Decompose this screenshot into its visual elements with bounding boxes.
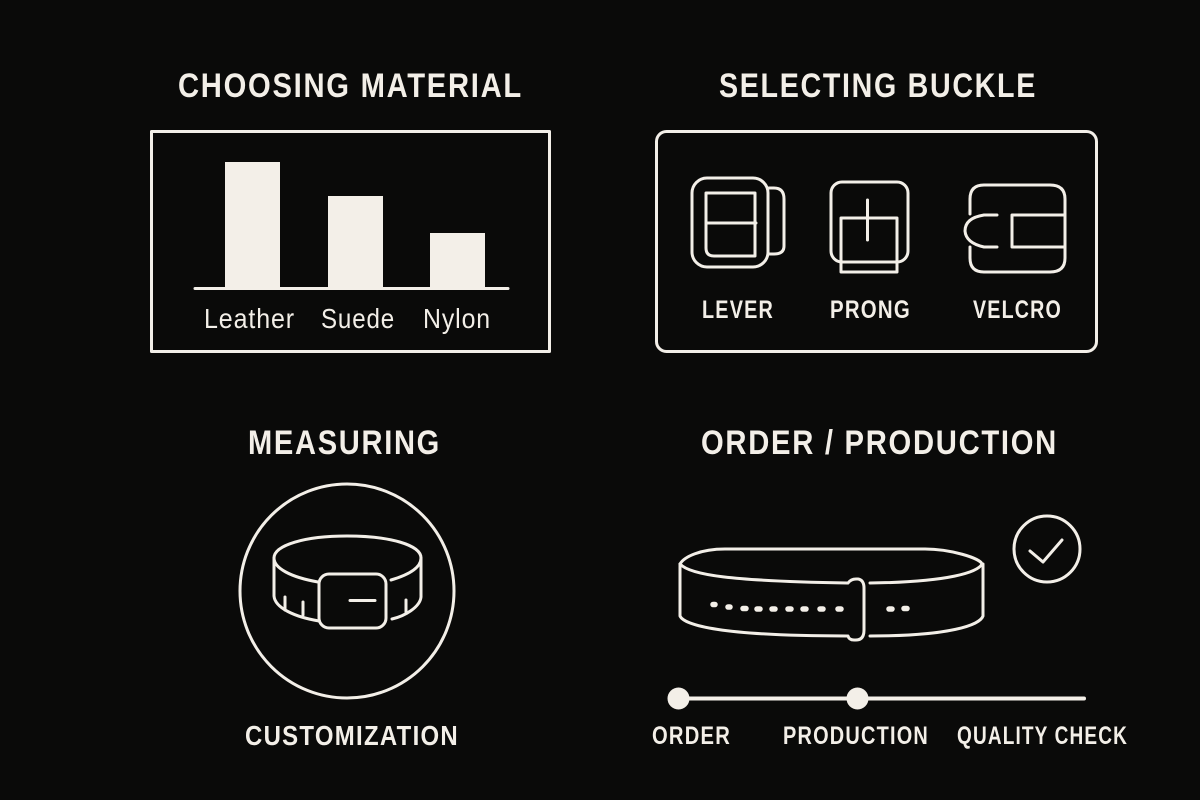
label: velcro: VELCRO [973,296,1062,324]
timeline labels [652,722,1128,750]
bar labels [204,303,491,334]
icon: quality check badge [1014,516,1080,582]
icon: velcro strap [965,185,1065,272]
heading: order / production: ORDER / PRODUCTION [701,424,1058,462]
timeline labels: PRODUCTION [783,722,929,750]
label: prong: PRONG [830,296,911,324]
label: lever: LEVER [702,296,774,324]
bar chart: materials [195,162,508,289]
icon: finished belt [680,549,983,640]
panel: choosing material [152,132,550,352]
heading: selecting buckle: SELECTING BUCKLE [719,67,1037,105]
icon: lever buckle [692,178,784,267]
bar labels: Leather [204,303,295,334]
icon: measuring belt in circle [240,484,454,698]
heading: measuring: MEASURING [248,424,441,462]
timeline labels: ORDER [652,722,731,750]
heading: choosing material: CHOOSING MATERIAL [178,67,523,105]
bar labels: Nylon [423,303,491,334]
timeline labels: QUALITY CHECK [957,722,1128,750]
label: customization: CUSTOMIZATION [245,720,459,751]
bar labels: Suede [321,303,395,334]
icon: prong buckle [831,182,908,272]
timeline [668,688,1084,710]
panel: selecting buckle [656,132,1096,352]
